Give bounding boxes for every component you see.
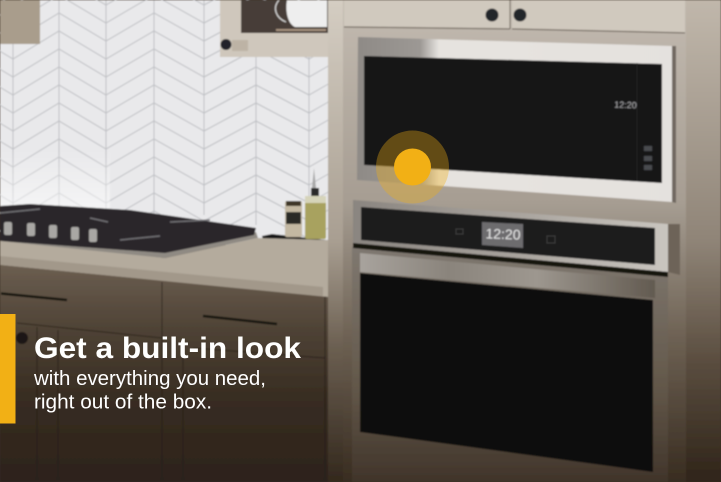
right side wall (686, 0, 721, 482)
heading: Get a built-in look (34, 332, 302, 365)
subheading line 2: right out of the box. (34, 392, 212, 414)
subheading line 1: with everything you need, (33, 368, 266, 390)
open shelf cabinet (220, 0, 328, 57)
upper left cabinet (0, 0, 40, 44)
oven display (482, 222, 523, 248)
hotspot marker (376, 130, 449, 204)
oven control panel (353, 200, 680, 275)
door knobs (486, 8, 498, 22)
microwave (357, 37, 676, 203)
upper cabinet doors (344, 0, 685, 33)
yellow accent bar (0, 314, 16, 424)
countertop (0, 238, 328, 297)
counter bottles and tray (262, 168, 326, 250)
oven tower cabinet (343, 0, 688, 482)
microwave buttons (644, 146, 652, 170)
oven handle (360, 253, 655, 298)
base cabinets (0, 265, 328, 482)
cooktop (0, 204, 258, 258)
tall side panel (328, 0, 343, 482)
tiled backsplash (0, 0, 330, 245)
cooktop knobs (4, 222, 97, 242)
microwave clock: 12:20 (614, 100, 637, 110)
oven control panel: 12:20 (485, 225, 521, 243)
headline text (33, 332, 302, 414)
oven door (352, 243, 668, 482)
oven window (360, 273, 653, 472)
drawer handles (1, 294, 277, 324)
